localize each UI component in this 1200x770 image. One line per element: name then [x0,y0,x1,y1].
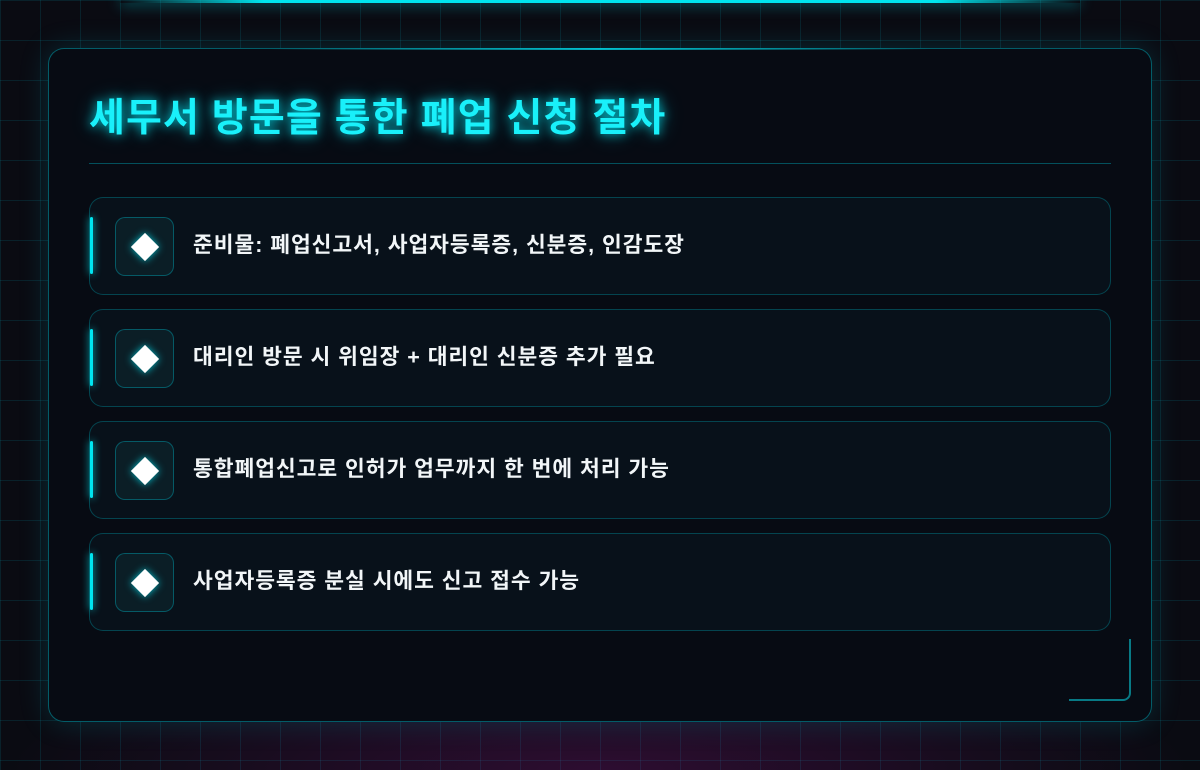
text 4: 사업자등록증 분실 시에도 신고 접수 가능 [193,569,580,593]
icon: diamond [115,217,174,276]
item 3 [89,421,1111,519]
item 4 [89,533,1111,631]
icon: diamond [115,329,174,388]
icon: diamond [115,553,174,612]
item 2 [89,309,1111,407]
text 1: 준비물: 폐업신고서, 사업자등록증, 신분증, 인감도장 [193,233,685,257]
title: 세무서 방문을 통한 폐업 신청 절차 [89,97,666,140]
text 2: 대리인 방문 시 위임장 + 대리인 신분증 추가 필요 [193,345,656,369]
item 1 [89,197,1111,295]
icon: diamond [115,441,174,500]
corner bracket [1069,639,1131,701]
text 3: 통합폐업신고로 인허가 업무까지 한 번에 처리 가능 [193,457,670,481]
